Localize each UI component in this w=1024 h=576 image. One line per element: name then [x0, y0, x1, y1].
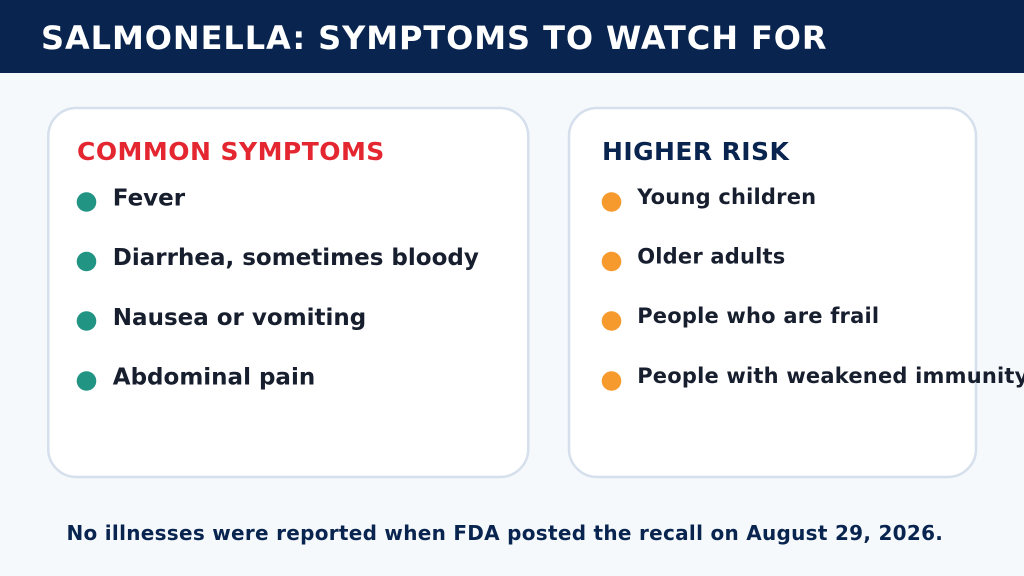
- panel: higher risk: [569, 108, 1024, 477]
- header banner: [0, 0, 1024, 73]
- item: diarrhea: Diarrhea, sometimes bloody: [113, 245, 479, 271]
- item: nausea: Nausea or vomiting: [113, 305, 366, 331]
- item: weakened immunity: People with weakened immunity: [637, 364, 1024, 388]
- heading: common symptoms: COMMON SYMPTOMS: [77, 137, 385, 166]
- item: fever: Fever: [113, 186, 186, 212]
- footer note: No illnesses were reported when FDA posted the recall on August 29, 2026.: [66, 521, 943, 545]
- item: fever: [77, 186, 186, 212]
- heading: higher risk: HIGHER RISK: [602, 137, 790, 166]
- item: young children: Young children: [636, 185, 816, 209]
- title: SALMONELLA: SYMPTOMS TO WATCH FOR: [41, 19, 828, 57]
- item: abdominal pain: Abdominal pain: [113, 364, 315, 390]
- item: frail people: People who are frail: [637, 304, 879, 328]
- item: older adults: Older adults: [637, 245, 785, 269]
- panel: common symptoms: [48, 108, 528, 477]
